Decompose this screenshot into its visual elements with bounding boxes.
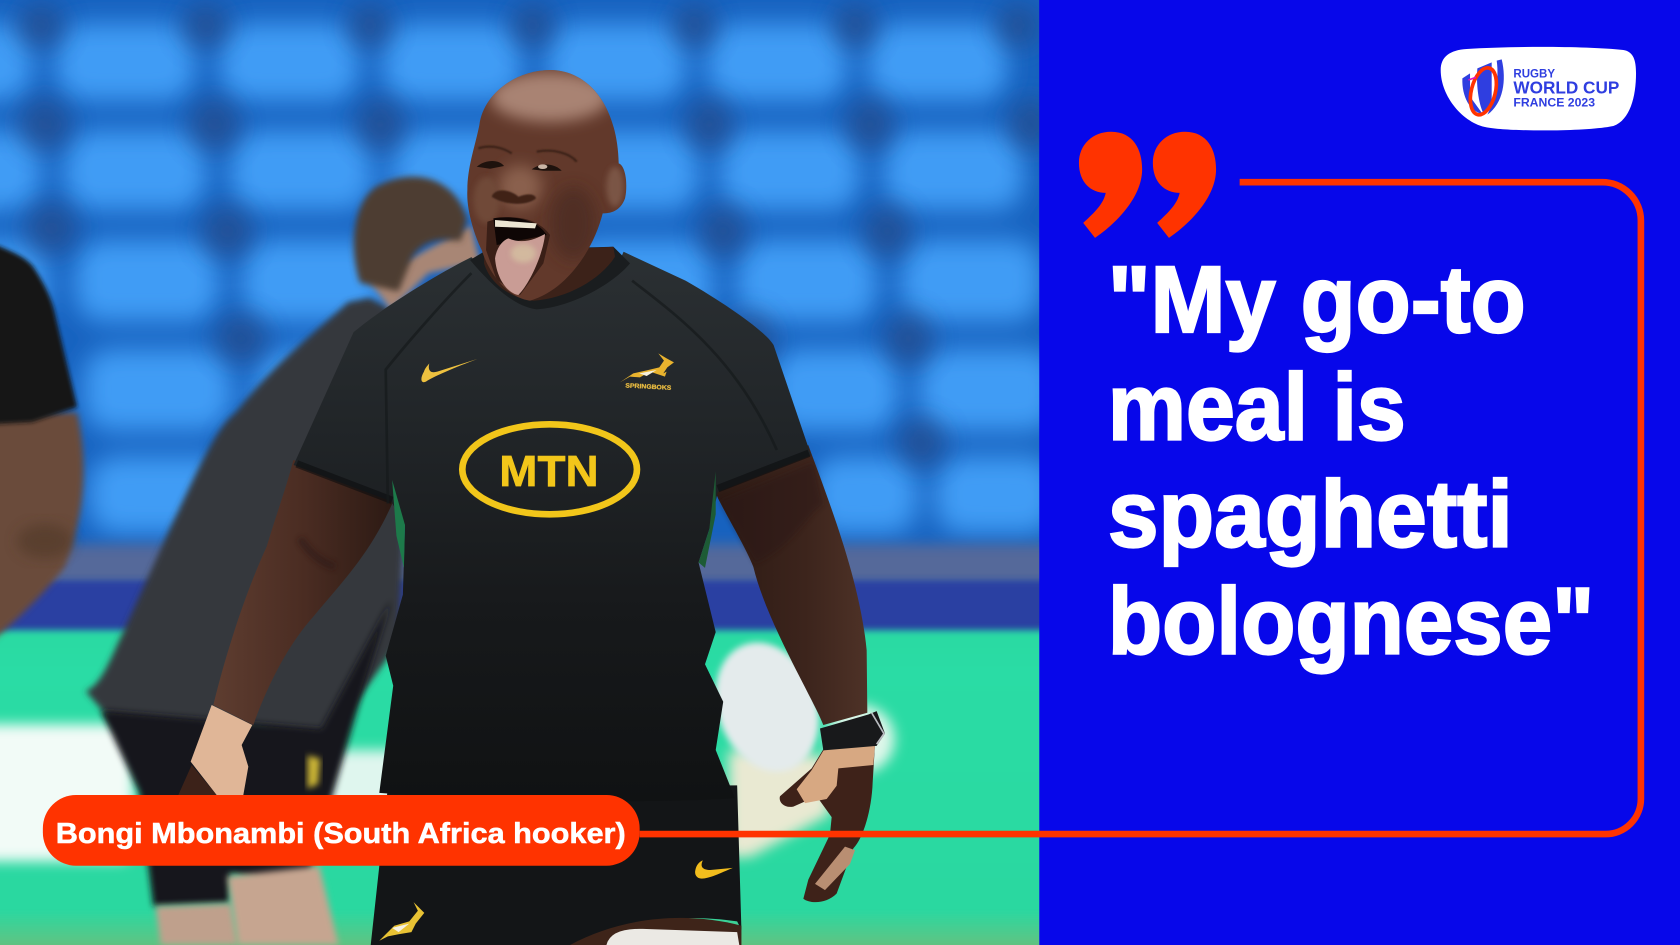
name label pill [43,795,640,866]
MTN logo [462,424,637,514]
mouth [486,217,550,295]
icon: nike swoosh [421,359,477,382]
head shape [467,70,626,301]
icon: rugby posts emblem [1462,59,1504,118]
tongue [495,234,545,295]
quote text [1108,247,1594,674]
logo wordmark [1513,66,1619,110]
quote text: meal is [1108,354,1406,459]
MTN logo: MTN [499,448,599,496]
jersey logos [421,353,674,514]
nose [492,190,536,204]
connecting outline frame [640,182,1641,834]
wrist tape [191,705,252,795]
quote text: bolognese" [1108,569,1594,674]
photo: rugby player in stadium [0,0,1061,945]
logo wordmark: FRANCE 2023 [1513,96,1595,110]
main player arm left [178,460,397,795]
Rugby World Cup logo [1441,47,1636,130]
stadium seats background [0,0,1056,600]
jersey [294,252,811,801]
quote text: spaghetti [1108,461,1513,566]
blurred advertising boards [0,724,134,861]
logo wordmark: RUGBY [1513,66,1555,80]
wrist tape [797,742,875,803]
neck and collar [470,247,630,309]
name label pill: Bongi Mbonambi (South Africa hooker) [56,818,626,850]
icon: springbok [620,353,674,382]
seams [297,453,809,500]
icon: nike swoosh on shorts [695,860,733,879]
springboks wordmark: SPRINGBOKS [625,382,672,392]
player head [460,63,633,309]
left edge player [0,242,83,643]
watch [820,711,885,750]
logo wordmark: WORLD CUP [1513,78,1619,98]
shorts [371,785,741,945]
main player arm right [712,445,885,902]
quote text: "My go-to [1108,247,1526,352]
background person [86,177,480,945]
rugby ball [698,628,836,786]
eyes [477,161,504,169]
hand [780,744,875,902]
blue quote panel [1039,0,1680,945]
stand wall and field [0,544,1061,945]
icon: quotation marks [1079,132,1216,238]
icon: springbok on shorts [379,902,424,941]
green side panels [392,480,405,568]
